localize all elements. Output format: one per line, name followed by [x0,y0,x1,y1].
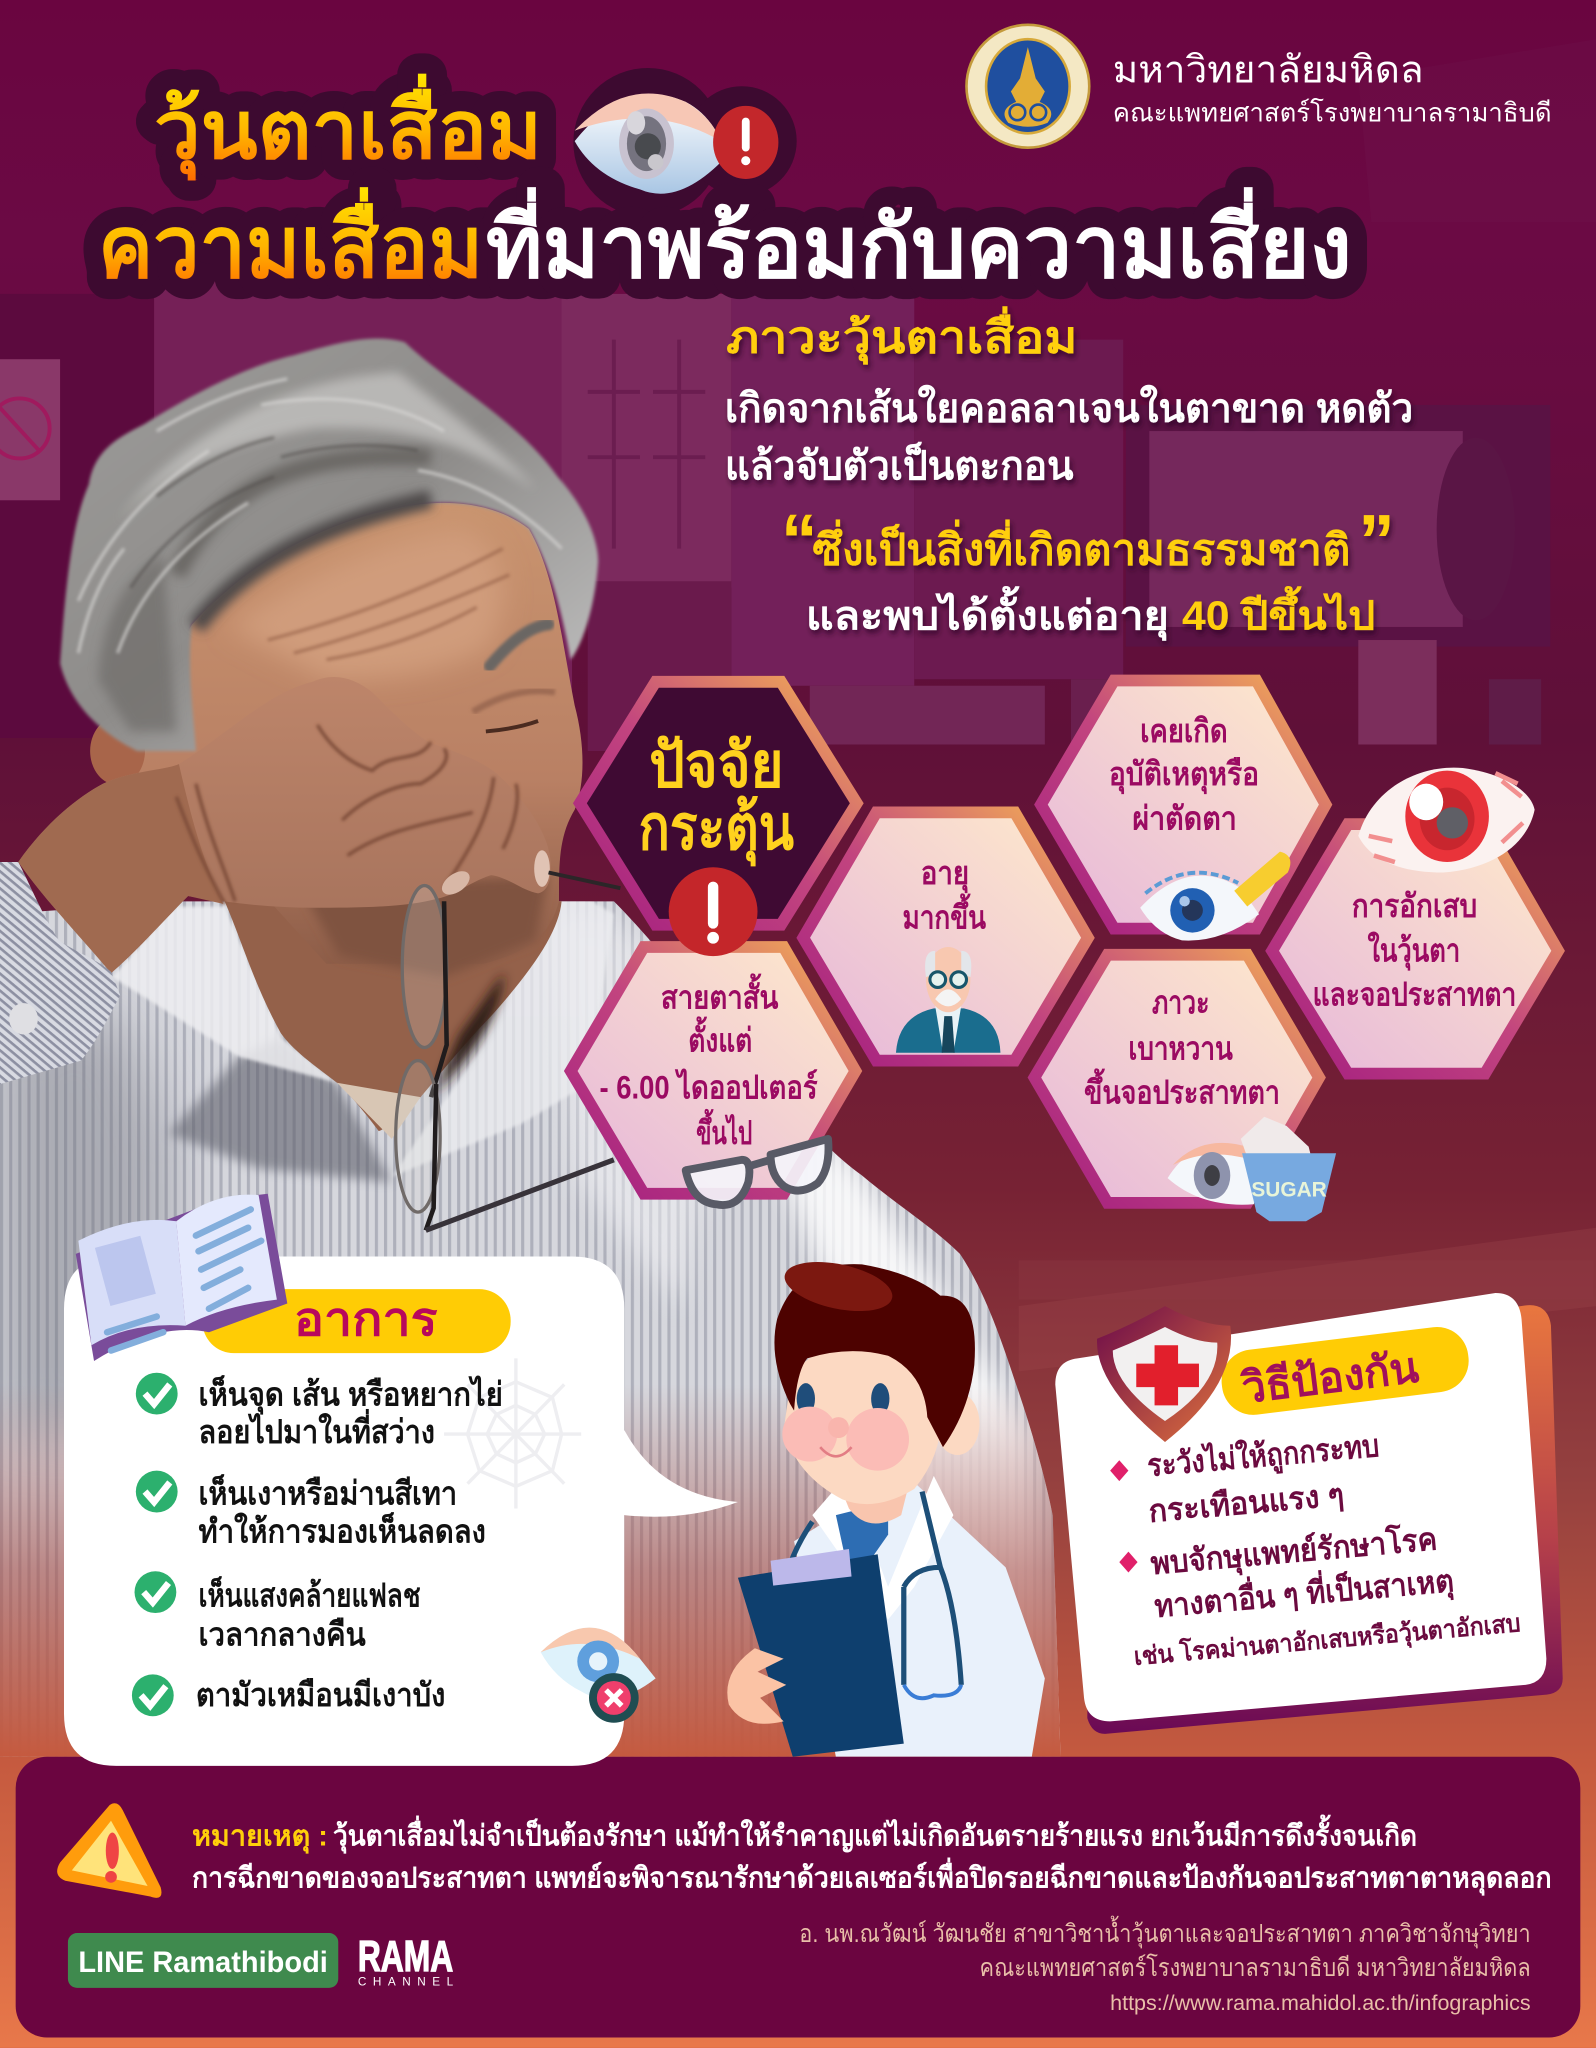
man: shirt button [9,1003,38,1034]
symptom list: เห็นจุด เส้น หรือหยากไย่ [199,1374,503,1415]
doctor: head [784,1345,941,1504]
man: striped cuff [0,862,120,1084]
symptom list [196,1374,503,1713]
intro text block: ซึ่งเป็นสิ่งที่เกิดตามธรรมชาติ [812,519,1350,574]
hexagon: high myopia: ตั้งแต่ [688,1015,752,1058]
man: shirt [0,883,1071,1763]
title line 2: ความเสื่อม [98,186,483,296]
intro text block: และพบได้ตั้งแต่อายุ [806,586,1169,642]
symptom list: เวลากลางคืน [199,1616,366,1653]
doctor: neck [836,1463,914,1523]
hexagon: diabetic retinopathy: ภาวะ [1152,984,1209,1021]
title line 1 with gradient: วุ้นตาเสื่อม [154,73,542,181]
intro text block [725,306,1413,642]
doctor: hair [774,1264,975,1447]
doctor: hand [727,1648,786,1724]
heading pill: prevention: วิธีป้องกัน [1238,1344,1422,1413]
hexagon: eye injury or surgery [1041,681,1326,941]
background: blurred clinic room [0,39,1596,1371]
RAMA Channel logo [358,1933,454,1988]
intro text block: แล้วจับตัวเป็นตะกอน [725,440,1074,488]
intro text block: ” [1358,501,1395,582]
man: face [131,503,583,964]
hexagon: age: มากขึ้น [902,893,987,936]
card white face [1055,1293,1546,1721]
hexagon: inflammation: และจอประสาทตา [1313,976,1516,1013]
icon: old man [896,947,1000,1053]
prevention list: ทางตาอื่น ๆ ที่เป็นสาเหตุ [1153,1558,1455,1626]
symptom list: เห็นแสงคล้ายแฟลช [199,1576,421,1614]
footer panel [16,1757,1580,2037]
author credits [799,1916,1531,2015]
hexagon: diabetic retinopathy: ขึ้นจอประสาทตา [1084,1068,1280,1111]
doctor: eyes and cheeks [797,1383,815,1415]
title line 2: ความเสื่อมที่มาพร้อมกับความเสี่ยง [98,186,1352,296]
symptom list: ทำให้การมองเห็นลดลง [199,1512,486,1550]
title line 2: ที่มาพร้อมกับความเสี่ยง [486,186,1352,296]
hexagon: high myopia: ขึ้นไป [696,1108,752,1151]
hexagon: high myopia [571,947,855,1205]
doctor: stethoscope [784,1492,961,1685]
hexagon: age: อายุ [921,854,969,894]
hexagon: inflammation: ในวุ้นตา [1367,930,1460,971]
man: neck [225,901,562,1131]
hexagon: high myopia: สายตาสั้น [661,972,779,1015]
hexagon: eye injury or surgery: เคยเกิด [1140,712,1228,749]
hexagon: eye injury or surgery: ผ่าตัดตา [1132,799,1237,836]
prevention list: เช่น โรคม่านตาอักเสบหรือวุ้นตาอักเสบ [1133,1607,1522,1673]
RAMA Channel logo: CHANNEL [358,1975,454,1988]
author credits: คณะแพทยศาสตร์โรงพยาบาลรามาธิบดี มหาวิทยาลัยมหิดล [980,1953,1531,1982]
symptom list: ตามัวเหมือนมีเงาบัง [196,1676,445,1713]
icon: warning triangle [57,1803,161,1898]
hexagon: age [803,812,1088,1061]
icon: shield with red cross [1097,1306,1231,1442]
intro text block: ภาวะวุ้นตาเสื่อม [726,306,1077,366]
man: glasses held in hand [396,872,620,1230]
intro text block: “ [781,501,818,582]
bullet diamonds [1110,1460,1138,1573]
icon: eye with alert badge [573,68,797,217]
man: ear [90,717,145,785]
symptoms speech bubble [64,1194,738,1766]
note text [192,1815,1552,1895]
icon: inflamed red eye [1358,768,1535,872]
heading pill: prevention [1218,1323,1472,1418]
hexagon: triggers heading [580,682,857,925]
hexagon: inflammation [1272,768,1558,1074]
prevention list: พบจักษุแพทย์รักษาโรค [1149,1519,1439,1583]
logo text: university name [1113,49,1552,128]
hexagon: eye injury or surgery: อุบัติเหตุหรือ [1109,755,1259,795]
intro text block: 40 ปีขึ้นไป [1182,586,1375,639]
icon: eye with contact lens [541,1628,656,1723]
man: forearm and fist [18,677,551,973]
man: grey hair [60,339,598,751]
RAMA Channel logo: RAMA [358,1933,453,1981]
doctor illustration [727,1253,1045,1757]
author credits: https://www.rama.mahidol.ac.th/infographics [1110,1992,1531,2015]
hexagon: inflammation: การอักเสบ [1352,887,1477,924]
icon: eye and sugar cup: SUGAR [1251,1178,1327,1201]
prevention list: ระวังไม่ให้ถูกกระทบ [1146,1427,1381,1485]
photo: older man rubbing his eye [0,339,1071,1763]
logo text: university name: มหาวิทยาลัยมหิดล [1113,49,1424,91]
icon: red alert badge [669,867,758,956]
hexagon: triggers heading: ปัจจัย [649,730,784,800]
prevention list: กระเทือนแรง ๆ [1147,1477,1345,1529]
note text: หมายเหตุ : [192,1821,328,1854]
icon: open book [76,1194,287,1361]
hexagon: diabetic retinopathy: เบาหวาน [1128,1029,1233,1066]
hexagon: diabetic retinopathy [1034,955,1336,1221]
prevention card [1055,1293,1559,1731]
doctor: clipboard [738,1554,904,1757]
logo: Mahidol University seal [966,25,1089,148]
card shadow layer [1091,1308,1559,1731]
note text: วุ้นตาเสื่อมไม่จำเป็นต้องรักษา แม้ทำให้รำคาญแต่ไม่เกิดอันตรายร้ายแรง ยกเว้นมีการดึงรั้งจนเกิด [333,1815,1417,1854]
icon: eye and sugar cup [1168,1117,1336,1221]
heading pill: symptoms [202,1289,511,1353]
icon: spider web [444,1358,581,1509]
hexagon: triggers heading: กระตุ้น [639,793,794,866]
LINE badge: LINE Ramathibodi [78,1946,328,1979]
heading pill: symptoms: อาการ [294,1294,438,1345]
prevention list [1116,1416,1522,1673]
icon: glasses [686,1139,828,1205]
symptom list: ลอยไปมาในที่สว่าง [199,1409,435,1450]
hexagon: high myopia: - 6.00 ไดออปเตอร์ [599,1068,818,1105]
icon: eye with scalpel [1140,852,1290,941]
doctor: white coat [794,1482,1045,1757]
symptom list: เห็นเงาหรือม่านสีเทา [199,1474,457,1512]
intro text block: เกิดจากเส้นใยคอลลาเจนในตาขาด หดตัว [725,384,1413,431]
symptom checks [132,1373,178,1716]
LINE badge [68,1933,338,1988]
logo text: university name: คณะแพทยศาสตร์โรงพยาบาลรามาธิบดี [1113,98,1552,128]
